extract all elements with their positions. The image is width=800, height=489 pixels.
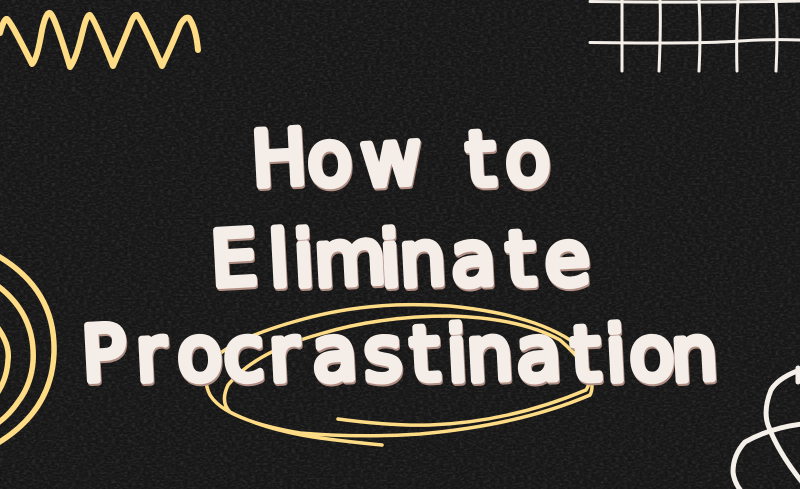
curled line doodle bbox=[733, 368, 800, 489]
grid doodle bbox=[590, 0, 800, 71]
title line: Eliminate: Eliminate bbox=[208, 212, 592, 304]
concentric arcs doodle bbox=[0, 256, 54, 443]
title bbox=[79, 113, 720, 399]
zigzag doodle bbox=[0, 13, 198, 67]
title line: Procrastination: Procrastination bbox=[79, 309, 720, 399]
title line: How to: How to bbox=[249, 113, 552, 204]
scribble loop circling the word bbox=[206, 305, 592, 445]
